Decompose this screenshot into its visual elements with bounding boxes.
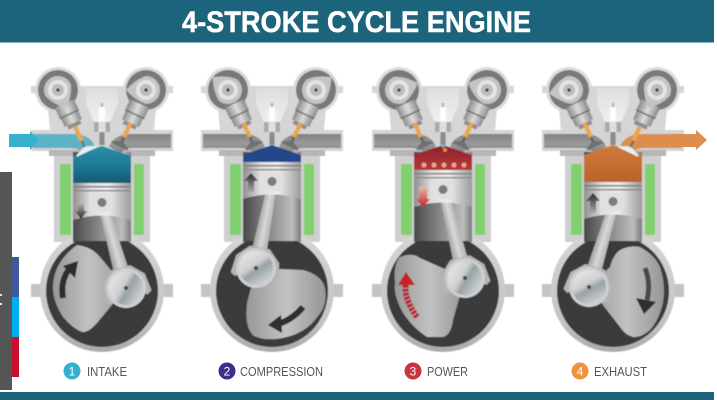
crank counterweight (246, 268, 326, 339)
crank arrow head (268, 315, 282, 333)
exhaust port with gas (620, 134, 682, 153)
intake port with air (33, 134, 95, 153)
side panel marks (0, 294, 2, 305)
step 3 number: 3 (410, 364, 417, 378)
crank rotation arrow (278, 307, 303, 324)
exhaust valve train (442, 63, 514, 155)
spark plug (435, 103, 451, 145)
title: 4-STROKE CYCLE ENGINE (182, 6, 531, 39)
piston (584, 182, 642, 219)
share button blue (12, 257, 19, 297)
spark plug (264, 103, 280, 145)
panel: engine 2 compression (201, 63, 343, 352)
crank rotation arrow (62, 268, 70, 298)
crank arrow head (63, 261, 78, 278)
step 2 badge (218, 362, 236, 380)
intake cam (204, 66, 248, 110)
exhaust gas chamber (584, 145, 642, 182)
exhaust port closed (109, 134, 171, 153)
step 1 number: 1 (69, 364, 76, 378)
step 1 badge (64, 362, 80, 380)
compressed mixture chamber (243, 145, 301, 162)
top title bar (0, 0, 714, 42)
exhaust cam (126, 76, 160, 104)
step 2 label: COMPRESSION (240, 365, 323, 379)
step 3 label: POWER (427, 365, 468, 379)
connecting rod and crank journal (79, 197, 154, 314)
intake valve train (542, 63, 614, 155)
bottom bar (0, 392, 714, 400)
connecting rod and crank journal (560, 196, 637, 313)
intake port closed (203, 134, 265, 153)
crank counterweight (589, 246, 664, 337)
step 4 badge (572, 362, 588, 380)
exhaust arrow (672, 130, 707, 150)
connecting rod and crank journal (420, 187, 493, 303)
exhaust cam (636, 71, 676, 114)
piston (73, 183, 131, 220)
share button cyan (12, 297, 19, 337)
intake valve train (372, 63, 444, 155)
exhaust cam (463, 70, 505, 108)
share button red (12, 337, 19, 377)
piston arrow down red (416, 187, 430, 207)
panel: engine 3 power (372, 63, 514, 352)
piston arrow up (244, 173, 258, 192)
piston arrow up (586, 193, 600, 213)
connecting rod and crank journal (229, 177, 296, 292)
exhaust valve train (610, 63, 684, 161)
intake cam (381, 70, 423, 108)
combustion chamber (414, 145, 472, 170)
spark (441, 144, 445, 148)
intake cam (547, 74, 585, 107)
intake valve train (201, 63, 273, 155)
intake valve train (31, 63, 105, 161)
crank counterweight (53, 245, 126, 332)
intake port closed (374, 134, 436, 153)
title underline (0, 42, 714, 43)
step 1 label: INTAKE (87, 365, 127, 379)
step 3 badge (404, 362, 422, 380)
panel: engine 1 intake (31, 63, 173, 352)
spark plug (94, 103, 110, 145)
spark plug (605, 103, 621, 145)
crank rotation arrow (405, 283, 417, 317)
panel: engine 4 exhaust (542, 63, 684, 352)
crank counterweight (395, 255, 465, 337)
intake arrow (9, 131, 39, 150)
piston (414, 170, 472, 207)
step 4 number: 4 (577, 364, 584, 378)
exhaust port closed (279, 134, 341, 153)
exhaust valve train (101, 63, 173, 155)
fuel air mixture chamber (73, 146, 131, 183)
crank arrow head (398, 272, 415, 285)
exhaust cam (296, 66, 340, 110)
piston (243, 162, 301, 199)
combustion flames (422, 148, 466, 168)
exhaust port closed (450, 134, 512, 153)
crank arrow head (636, 298, 656, 314)
piston arrow down (75, 204, 87, 219)
crank rotation arrow (645, 268, 649, 300)
step 4 label: EXHAUST (594, 365, 647, 379)
step 2 number: 2 (224, 364, 231, 378)
intake cam (39, 71, 79, 114)
intake port closed (544, 134, 606, 153)
exhaust valve train (271, 63, 343, 155)
left side dark panel (0, 172, 12, 390)
